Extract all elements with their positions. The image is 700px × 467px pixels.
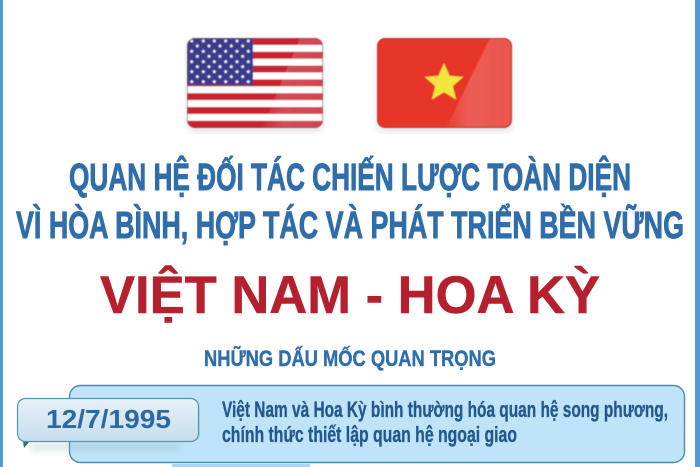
date badge: [18, 398, 200, 448]
panel: milestone 12/7/1995: [18, 386, 684, 467]
left border bar: [0, 0, 3, 467]
right border bar: [695, 0, 700, 467]
heading: Việt Nam - Hoa Kỳ: VIỆT NAM - HOA KỲ: [100, 264, 600, 325]
icon: United States flag: [187, 38, 323, 132]
milestone card: [70, 386, 684, 462]
milestone description line 2: chính thức thiết lập quan hệ ngoại giao: [222, 422, 517, 447]
date text: 12/7/1995: [46, 404, 171, 434]
subheading: important milestones: NHỮNG DẤU MỐC QUAN TRỌNG: [204, 345, 496, 371]
date badge shadow: [30, 443, 180, 451]
next panel peek: [172, 464, 310, 467]
icon: Vietnam flag: [377, 38, 512, 132]
